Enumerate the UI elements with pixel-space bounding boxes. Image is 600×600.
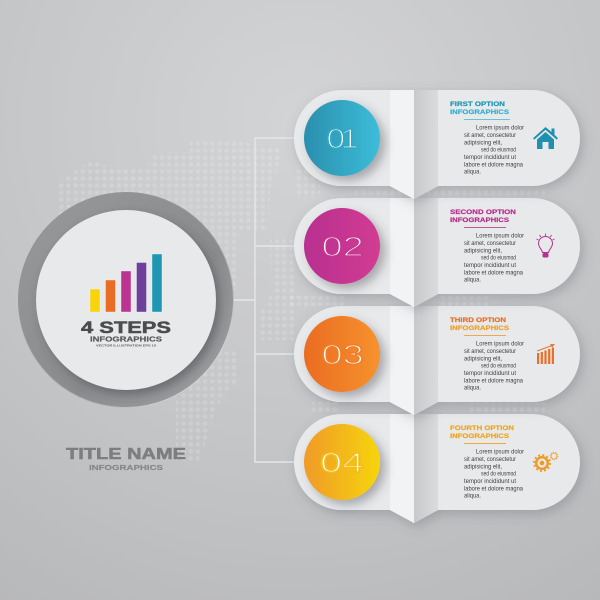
body text: sit amet, consectetur (464, 240, 517, 247)
number badge (304, 100, 380, 176)
hub inner disc (36, 210, 216, 390)
body text (464, 448, 525, 500)
body text: adipisicing elit, (464, 355, 502, 362)
card body (294, 414, 580, 523)
body text: sed do eiusmod (481, 363, 516, 370)
body text: tempor incididunt ut (464, 478, 516, 485)
option subheading: INFOGRAPHICS (450, 109, 509, 116)
body text: aliqua. (464, 169, 481, 176)
number: 02 (322, 232, 364, 263)
number: 01 (326, 123, 359, 154)
body text (464, 340, 525, 392)
body text: adipisicing elit, (464, 139, 502, 146)
dotted world map (58, 141, 545, 462)
hub: 4 steps circle (18, 192, 234, 408)
option subheading: INFOGRAPHICS (450, 325, 509, 332)
body text: Lorem ipsum dolor (476, 340, 525, 348)
underline (464, 226, 506, 229)
option subheading: INFOGRAPHICS (450, 217, 509, 224)
body text: sit amet, consectetur (464, 132, 517, 139)
body text: adipisicing elit, (464, 463, 502, 470)
number: 04 (320, 448, 364, 479)
body text (464, 124, 525, 176)
body text: labore et dolore magna (464, 161, 523, 168)
panel: step 03 (294, 306, 580, 415)
title subtitle: INFOGRAPHICS (89, 463, 163, 472)
connector lines (216, 138, 295, 462)
card body (294, 198, 580, 307)
body text: tempor incididunt ut (464, 262, 516, 269)
option heading: FOURTH OPTION (450, 425, 515, 432)
card fold (390, 306, 438, 415)
icon: house (533, 127, 558, 149)
body text: sit amet, consectetur (464, 348, 517, 355)
body text (464, 232, 525, 284)
option heading: THIRD OPTION (450, 317, 507, 324)
body text: sed do eiusmod (481, 147, 516, 154)
option heading: SECOND OPTION (450, 209, 517, 216)
body text: tempor incididunt ut (464, 370, 516, 377)
icon: light bulb (536, 234, 554, 258)
body text: adipisicing elit, (464, 247, 502, 254)
body text: labore et dolore magna (464, 377, 523, 384)
hub subheading: INFOGRAPHICS (90, 334, 162, 344)
panel: step 04 (294, 414, 580, 523)
body text: tempor incididunt ut (464, 154, 516, 161)
body text: sed do eiusmod (481, 471, 516, 478)
option heading: FIRST OPTION (450, 101, 506, 108)
panel: step 01 (294, 90, 580, 199)
number: 03 (322, 340, 364, 371)
card body (294, 90, 580, 199)
number badge (304, 208, 380, 284)
hub caption: VECTOR ILLUSTRATION EPS 10 (96, 344, 157, 348)
body text: labore et dolore magna (464, 485, 523, 492)
hub outer ring (18, 192, 234, 408)
panel: step 02 (294, 198, 580, 307)
body text: Lorem ipsum dolor (476, 232, 525, 240)
underline (464, 442, 506, 445)
card body (294, 306, 580, 415)
bar chart logo (90, 254, 162, 312)
underline (464, 334, 506, 337)
card fold (390, 90, 438, 199)
number badge (304, 316, 380, 392)
body text: labore et dolore magna (464, 269, 523, 276)
title block (66, 446, 186, 472)
body text: sed do eiusmod (481, 255, 516, 262)
body text: aliqua. (464, 493, 481, 500)
title name: TITLE NAME (66, 446, 186, 463)
body text: aliqua. (464, 385, 481, 392)
body text: Lorem ipsum dolor (476, 448, 525, 456)
option subheading: INFOGRAPHICS (450, 433, 509, 440)
body text: aliqua. (464, 277, 481, 284)
icon: rising chart (537, 344, 555, 364)
card fold (390, 414, 438, 523)
number badge (304, 424, 380, 500)
icon: gears (534, 452, 558, 471)
body text: sit amet, consectetur (464, 456, 517, 463)
underline (464, 118, 510, 121)
card fold (390, 198, 438, 307)
hub heading: 4 STEPS (81, 319, 171, 337)
body text: Lorem ipsum dolor (476, 124, 525, 132)
